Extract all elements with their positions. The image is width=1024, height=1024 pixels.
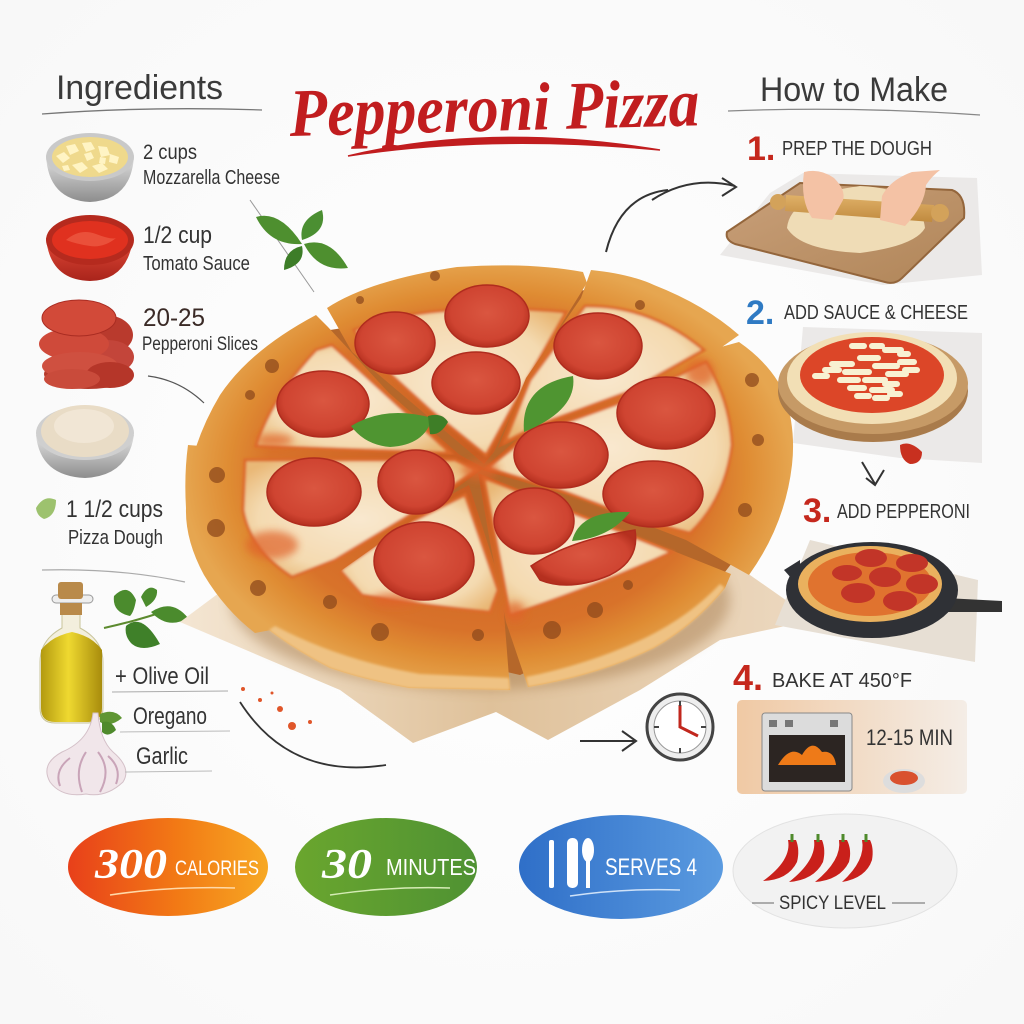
text: step 1 heading: PREP THE DOUGH — [782, 138, 932, 160]
heading: ingredients: Ingredients — [56, 69, 223, 107]
heading: ingredients — [42, 69, 262, 114]
badge: spicy level: SPICY LEVEL — [779, 893, 886, 914]
arrow: to step 1 — [606, 178, 736, 252]
text: 12-15 min: 12-15 MIN — [866, 725, 953, 750]
text: step 3 heading: ADD PEPPERONI — [837, 501, 970, 523]
illustration: sauce and cheese pizza — [778, 327, 982, 464]
ingredient: pepperoni slices — [39, 300, 258, 389]
text: mozzarella cheese: Mozzarella Cheese — [143, 167, 280, 189]
text: olive oil, oregano, garlic — [112, 663, 230, 772]
text: olive oil, oregano, garlic: + Olive Oil — [115, 663, 209, 690]
text: pepperoni slices: Pepperoni Slices — [142, 334, 258, 355]
slice: upper right — [498, 270, 739, 448]
icon: sauce bowl — [46, 215, 134, 281]
illustration: pan with pepperoni pizza — [775, 540, 1002, 662]
badge: spicy level — [733, 814, 957, 928]
icon: basil sprig by oil — [104, 588, 188, 648]
text: step 1 number: 1. — [747, 130, 775, 168]
ingredient: tomato sauce — [46, 215, 250, 281]
icon: cheese bowl — [46, 133, 134, 202]
slice: right — [482, 342, 793, 575]
step 1 — [720, 130, 982, 285]
text: step 4 number: 4. — [733, 657, 763, 698]
badge: minutes: 30 — [321, 842, 372, 888]
sauce splatter — [241, 687, 312, 730]
icon: chili peppers — [763, 834, 873, 882]
icon: garlic — [47, 712, 126, 795]
parchment paper — [180, 540, 800, 743]
badge: serves: SERVES 4 — [605, 854, 697, 881]
text: olive oil, oregano, garlic: Oregano — [133, 703, 207, 730]
step 3 — [775, 492, 1002, 662]
step 2 — [746, 294, 982, 485]
badge: calories — [68, 818, 268, 916]
text: pizza dough: Pizza Dough — [68, 527, 163, 549]
icon: small leaf — [36, 498, 56, 519]
icon: basil sprig top — [250, 200, 348, 292]
slice: left — [185, 445, 484, 633]
title: Pepperoni Pizza — [287, 64, 700, 151]
text: step 3 number: 3. — [803, 492, 831, 530]
pale crust rim — [269, 584, 725, 690]
crust toasted spots — [207, 271, 764, 641]
badge: serves — [519, 815, 723, 919]
icon: clock — [647, 694, 713, 760]
badge: calories: 300 — [94, 842, 167, 888]
ingredient: pizza dough — [36, 405, 163, 549]
text: 20-25: 20-25 — [143, 304, 205, 332]
pizza — [180, 265, 800, 743]
arrow: step 2 to 3 — [862, 462, 884, 485]
text: step 2 number: 2. — [746, 294, 774, 332]
dark gaps between slices — [205, 290, 765, 675]
text: tomato sauce: Tomato Sauce — [143, 253, 250, 275]
slice: top — [327, 265, 587, 464]
step 4 — [733, 657, 967, 794]
text: step 2 heading: ADD SAUCE & CHEESE — [784, 302, 968, 324]
arrow: pizza sweep — [240, 702, 386, 767]
basil leaves — [351, 376, 630, 541]
icon: olive oil bottle — [40, 582, 103, 723]
text: 1 1/2 cups: 1 1/2 cups — [66, 496, 163, 523]
arrow: clock — [580, 731, 636, 751]
heading: how to make: How to Make — [760, 71, 948, 109]
slice: bottom — [269, 485, 510, 690]
illustration: oven panel — [737, 700, 967, 794]
slice: lower right — [478, 473, 731, 687]
badge: calories: CALORIES — [175, 857, 259, 880]
pepperoni slices — [267, 285, 715, 600]
heading: how to make — [728, 71, 980, 115]
text: step 4 heading: BAKE AT 450°F — [772, 670, 912, 692]
ingredient: mozzarella cheese — [46, 133, 280, 202]
text: 1/2 cup: 1/2 cup — [143, 222, 212, 249]
shadow under pizza — [230, 510, 730, 690]
badge: minutes: MINUTES — [386, 854, 476, 880]
slice: upper left — [196, 315, 462, 457]
illustration: rolling dough — [720, 170, 982, 285]
badge: minutes — [295, 818, 477, 916]
icon: pepperoni stack — [39, 300, 134, 389]
text: 2 cups: 2 cups — [143, 141, 197, 164]
icon: dough bowl — [36, 405, 134, 478]
icon: cutlery — [549, 838, 594, 888]
text: olive oil, oregano, garlic: Garlic — [136, 743, 188, 770]
sauce patches — [246, 358, 714, 622]
